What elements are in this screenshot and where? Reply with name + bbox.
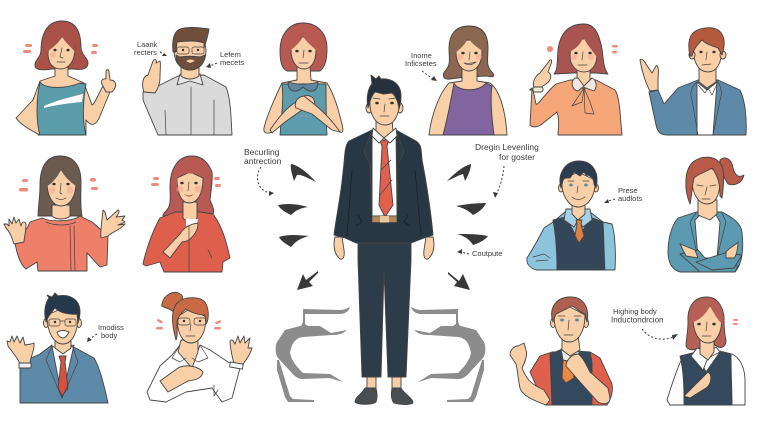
figure: woman in coral top with both hands raised xyxy=(4,156,125,271)
label: Dregin Levenling for goster: for goster xyxy=(499,152,535,162)
figure: woman in red hoodie with hand on chest xyxy=(143,156,230,272)
label: Imodiss body xyxy=(87,323,124,342)
label: Lefem mecets xyxy=(206,50,244,68)
label: Inome Inficsetes: Inome xyxy=(411,51,432,60)
figure: woman in purple top xyxy=(429,26,507,135)
label: Becurling antrection: Becurling xyxy=(244,147,280,157)
figure: man with glasses in blue suit xyxy=(7,293,108,403)
label: Prese audlots: audlots xyxy=(618,194,642,203)
arrow: left lower chevron xyxy=(279,235,309,247)
label: Prese audlots xyxy=(604,186,642,203)
label: Inome Inficsetes: Inficsetes xyxy=(405,59,437,68)
label: Dregin Levenling for goster: Dregin Levenling xyxy=(475,142,539,152)
label: Imodiss body: body xyxy=(101,331,118,340)
label: Laank recters: Laank xyxy=(137,40,158,49)
figure: woman with ponytail and crossed arms xyxy=(668,157,744,272)
label: Laank recters xyxy=(134,40,167,57)
bracket: left grey device xyxy=(276,307,350,402)
label: Prese audlots: Prese xyxy=(618,186,638,195)
label: Inome Inficsetes xyxy=(405,51,437,81)
label: Highing body Inductondrcion xyxy=(611,307,678,340)
bracket: right grey device xyxy=(411,307,485,402)
label: Becurling antrection xyxy=(244,147,282,196)
figure: central businessman in dark suit xyxy=(334,75,434,404)
figure: man in red shirt and vest holding tie xyxy=(510,297,612,405)
figure: woman in orange sweater with bow xyxy=(530,24,622,135)
label: Imodiss body: Imodiss xyxy=(98,323,124,332)
label: Lefem mecets: mecets xyxy=(220,58,244,67)
label: Dregin Levenling for goster xyxy=(475,142,539,198)
label: Highing body Inductondrcion: Highing body xyxy=(613,307,657,316)
label: Coutpute xyxy=(457,249,502,258)
figure: woman with glasses and bun in white shirt xyxy=(147,292,252,402)
label: Highing body Inductondrcion: Inductondrcion xyxy=(611,316,663,324)
figure: woman in dark vest with hand on chest xyxy=(667,297,745,405)
arrow: diagonal down-right xyxy=(448,272,470,290)
figure: man in blue blazer with raised hand xyxy=(640,28,746,135)
arrow: right middle chevron xyxy=(456,203,486,215)
arrow: left upper chevron xyxy=(291,164,316,182)
label: Coutpute: Coutpute xyxy=(472,249,502,258)
label: Lefem mecets: Lefem xyxy=(220,50,241,59)
arrow: diagonal down-left xyxy=(297,271,318,290)
figure: young man in vest with orange tie xyxy=(527,161,615,270)
arrow: right lower chevron xyxy=(457,234,488,245)
label: Laank recters: recters xyxy=(134,48,157,57)
figure: woman in teal top pointing up xyxy=(16,21,116,135)
figure: bearded man in grey shirt xyxy=(143,27,232,135)
arrow: left middle chevron xyxy=(278,204,308,215)
label: Becurling antrection: antrection xyxy=(244,156,282,166)
figure: woman in teal top with hands on chest xyxy=(264,23,343,135)
arrow: right upper chevron xyxy=(447,164,471,181)
